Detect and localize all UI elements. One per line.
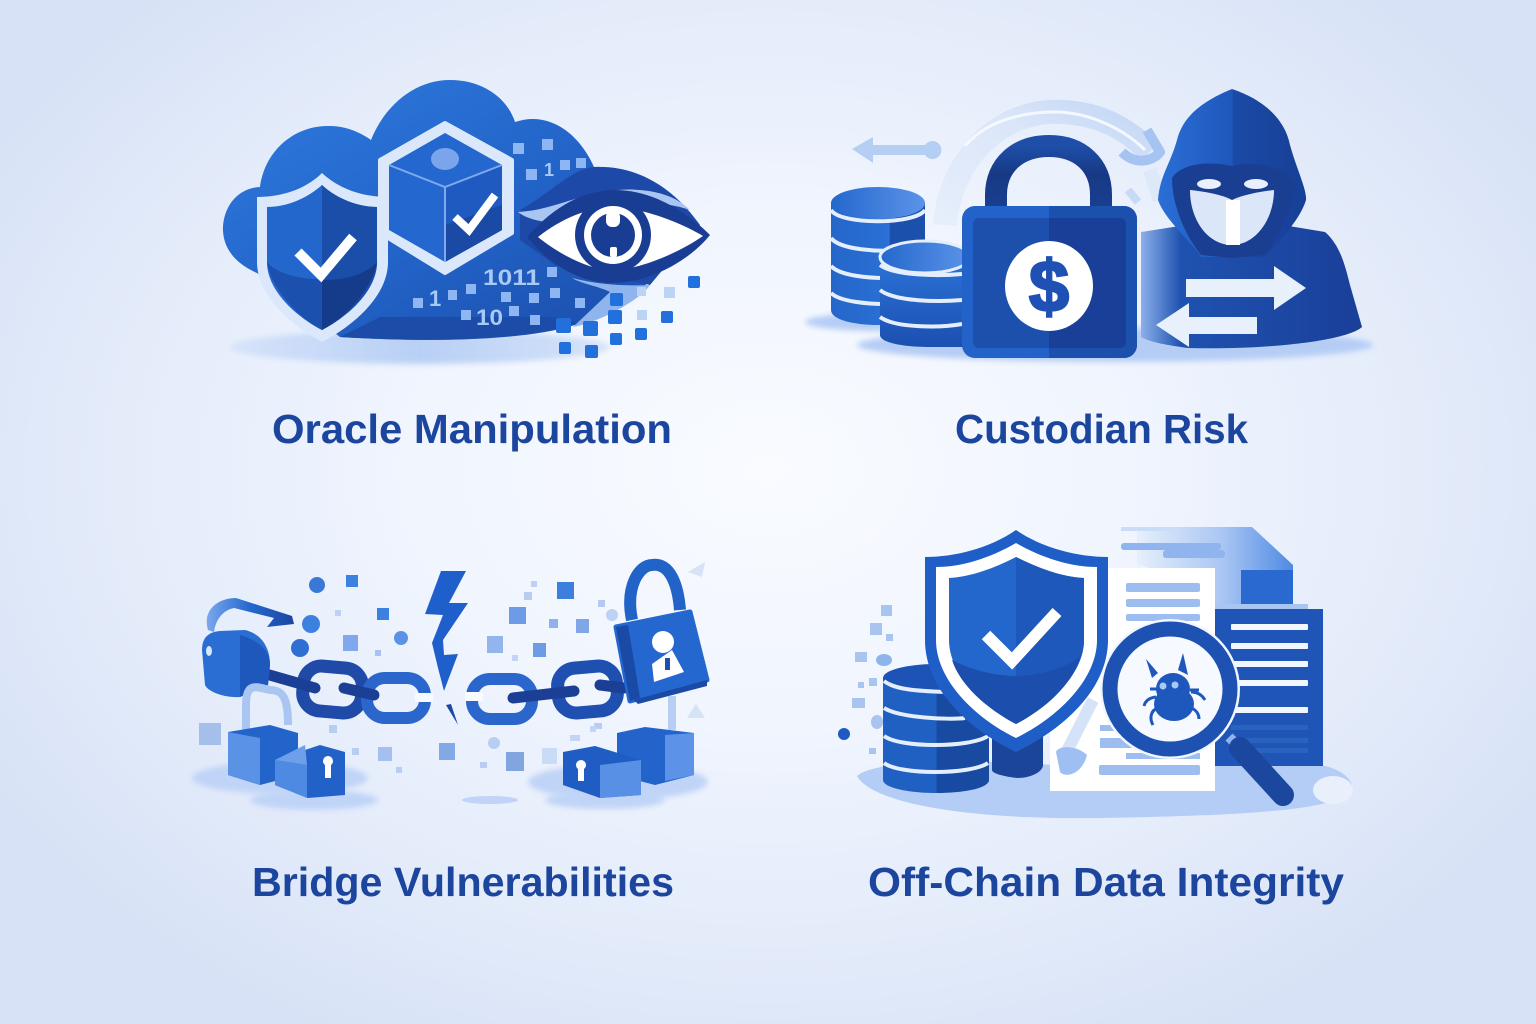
icon: dark wave behind eye [520,167,700,285]
binary digits: 1 [429,286,441,311]
icon: hooded hacker [1141,89,1362,348]
icon: curved arrow [207,598,294,632]
floating pixels left [199,575,455,773]
floating pixels right [480,562,705,771]
icon: blue document [1213,604,1323,766]
panel: Oracle Manipulation [223,80,710,364]
icon: cloud [223,80,700,340]
icon: transfer arrow [852,137,941,163]
icon: light swoosh [518,190,690,222]
icon: magnifier with bug [1100,619,1283,795]
icon: left anchor block [202,630,270,697]
icon: padlock: $ [1029,247,1069,327]
icon: stacked coins left [831,187,925,325]
scattered pixels [556,276,700,358]
ground shadow [857,760,1352,818]
panel: Custodian Risk [805,89,1373,362]
icon: exchange arrows [1156,266,1306,347]
icon: large shield with check [925,530,1108,752]
icon: lightning bolt [425,571,468,691]
heading: Oracle Manipulation: Oracle Manipulation [272,406,672,452]
data pixels and binary [413,139,586,325]
icon: data cube [380,123,512,273]
icon: dark cloud base [340,317,577,340]
floating pixels [838,605,893,754]
icon: stacked coins front [880,241,970,347]
icon: white report [1050,568,1215,791]
icon: broken bolt fragment [446,704,458,725]
panel: Bridge Vulnerabilities [192,562,708,810]
ground shadows [192,762,708,810]
ground shadow [230,330,610,364]
binary digits: 1011 [483,265,540,290]
icon: left boxes [228,687,345,798]
icon: data eye [527,190,710,283]
icon: rear document [1121,527,1293,610]
icon: security shield [257,173,388,342]
heading: Bridge Vulnerabilities: Bridge Vulnerabilities [252,859,674,905]
heading: Off-Chain Data Integrity: Off-Chain Data Integrity [868,859,1344,905]
icon: chain links [252,665,624,719]
binary digits: 1 [544,160,554,180]
icon: padlock [962,146,1137,358]
panel: Off-Chain Data Integrity [838,527,1353,818]
binary digits: 10 [476,305,503,330]
heading: Custodian Risk: Custodian Risk [955,406,1248,452]
binary digits [429,160,554,330]
ground shadows [805,313,1373,362]
icon: right padlock [616,565,707,704]
icon: arc arrow [945,112,1160,225]
highlight on ground shadow [1313,776,1353,804]
icon: right boxes [563,696,694,798]
icon: bug [1144,653,1205,725]
icon: database cylinders [883,664,1043,793]
